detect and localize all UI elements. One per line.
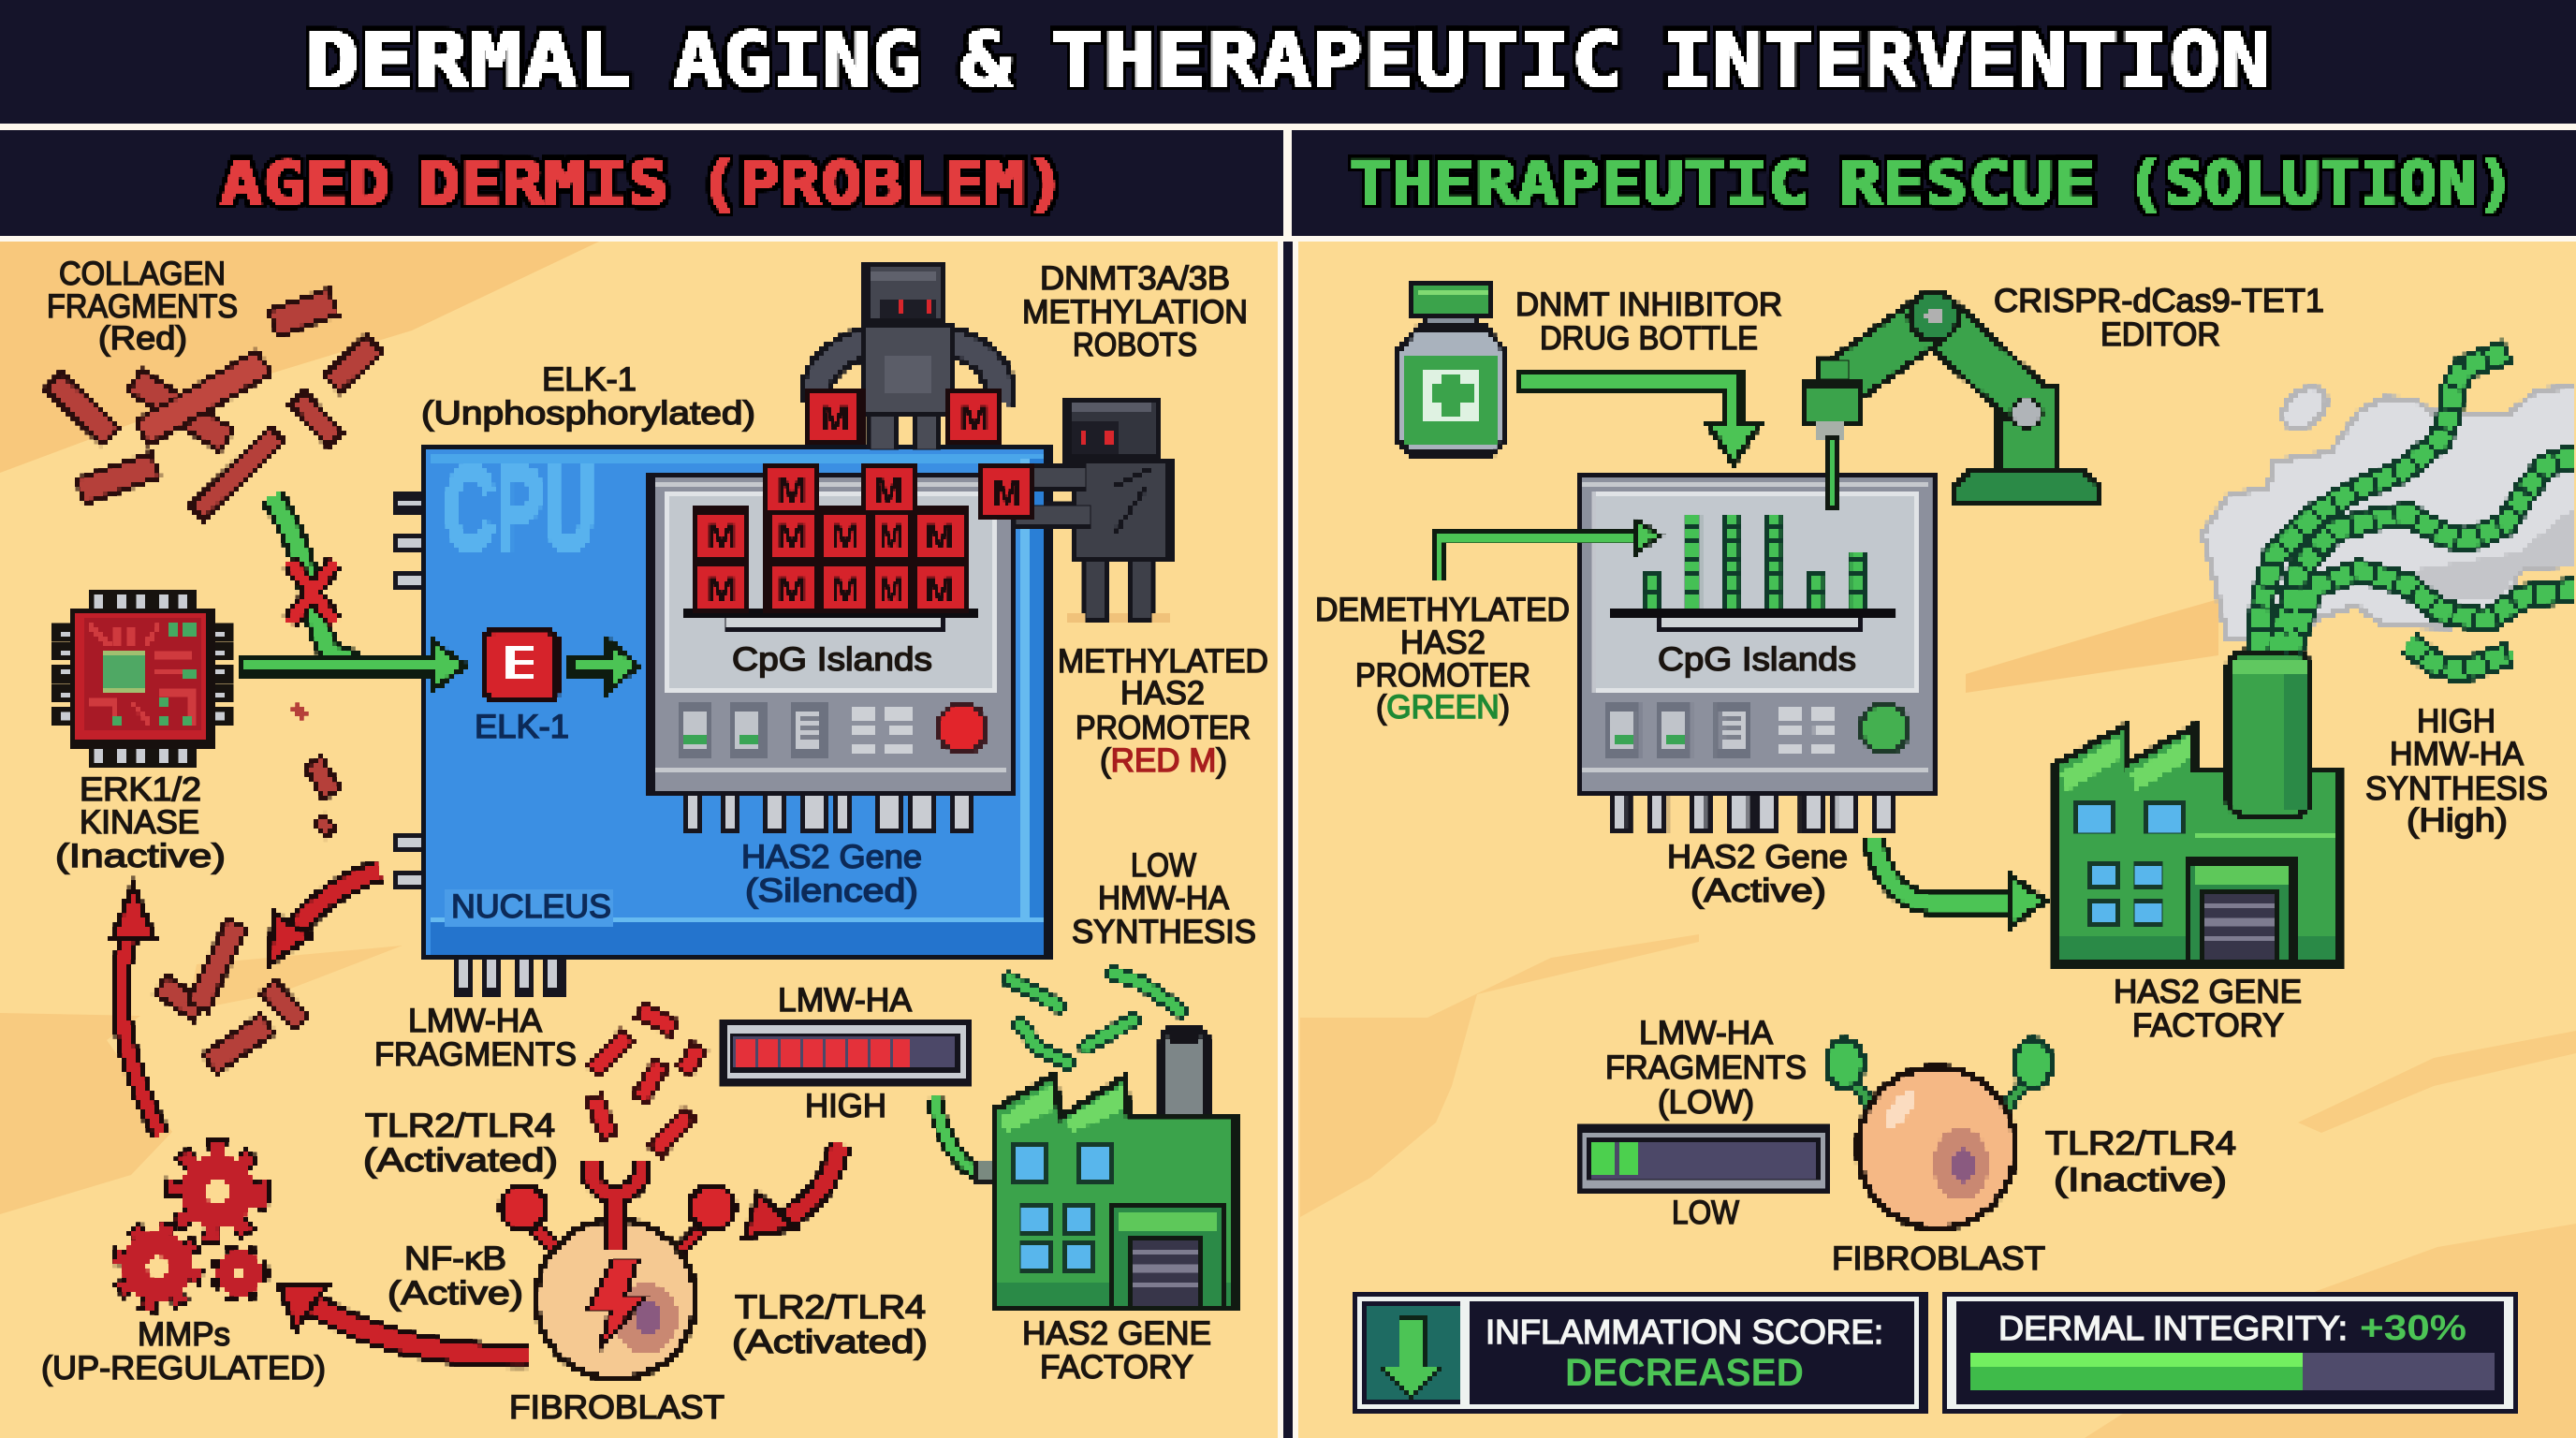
title: DERMAL	[305, 17, 632, 104]
label: DNMT inhibitor	[1515, 286, 1782, 357]
label: LMW-HA fragments: LMW-HA	[408, 1003, 543, 1039]
icon: high HMW-HA strands	[2259, 351, 2576, 671]
readout: dermal integrity text: +30%	[2360, 1309, 2466, 1348]
icon: ERK1/2 kinase chip	[56, 593, 228, 765]
arrow: blocked signal from collagen	[271, 496, 360, 663]
label: MMPs	[41, 1316, 326, 1387]
label: TLR inactive: TLR2/TLR4	[2045, 1125, 2236, 1162]
label: nucleus: NUCLEUS	[451, 888, 611, 925]
arrow: fibroblast to MMPs	[279, 1284, 529, 1356]
label: NF-kB: (Active)	[388, 1275, 523, 1312]
methyl block letters: M	[925, 518, 955, 557]
methyl block letters: M	[879, 518, 903, 557]
arrow: high LMW-HA to fibroblast	[744, 1144, 840, 1238]
labels: aged dermis	[41, 256, 1268, 1426]
title banner	[0, 0, 2576, 242]
label: ELK-1 unphosphorylated	[421, 361, 755, 432]
label: TLR activated left: TLR2/TLR4	[365, 1108, 555, 1144]
label: TLR inactive	[2045, 1125, 2236, 1198]
section header: therapeutic rescue: THERAPEUTIC	[1350, 150, 1809, 219]
label: LMW-HA fragments: FRAGMENTS	[374, 1036, 577, 1073]
label: collagen fragments: COLLAGEN	[59, 256, 226, 292]
title: THERAPEUTIC	[1051, 17, 1623, 104]
methyl block letters: M	[777, 571, 807, 610]
label: high HMW-HA synthesis: HMW-HA	[2390, 736, 2525, 772]
gene pins	[1612, 785, 1892, 831]
panel: HAS2 gene chip silenced	[651, 465, 1013, 831]
icon: methylation robot right	[982, 399, 1170, 624]
label: methylation robots: ROBOTS	[1073, 327, 1197, 363]
methyl block letters: M	[777, 518, 807, 557]
label: TLR activated right: (Activated)	[732, 1324, 928, 1360]
icon: degraded fragments near nucleus	[159, 922, 303, 1065]
label: HAS2 gene silenced: (Silenced)	[745, 873, 918, 909]
label: low HMW-HA synthesis: SYNTHESIS	[1072, 914, 1256, 950]
label: TLR activated right: TLR2/TLR4	[735, 1289, 926, 1326]
label: LMW-HA fragments	[374, 1003, 577, 1073]
methyl block letters: M	[831, 571, 859, 610]
label: collagen fragments: (Red)	[98, 320, 187, 357]
panel: nucleus chip	[394, 440, 1049, 992]
label: factory: FACTORY	[2132, 1007, 2284, 1044]
label: DNMT inhibitor: DNMT INHIBITOR	[1515, 286, 1782, 323]
label: LMW-HA low: (LOW)	[1658, 1084, 1754, 1121]
label: collagen fragments	[47, 256, 238, 357]
label: factory: HAS2 GENE	[1022, 1315, 1211, 1352]
arrow: active gene to factory	[1874, 838, 2045, 927]
label: methylated promoter: (RED M)	[1100, 742, 1227, 779]
methyl block letters: M	[707, 571, 737, 610]
label: ERK kinase: (Inactive)	[55, 838, 226, 874]
label: gauge title: LMW-HA	[778, 982, 913, 1019]
label: demethylated promoter: (GREEN)	[1376, 689, 1510, 726]
label: HAS2 gene silenced	[741, 839, 922, 909]
label: CRISPR editor: CRISPR-dCas9-TET1	[1994, 283, 2324, 319]
methyl block letters: M	[992, 474, 1022, 513]
callout: dermal integrity	[1945, 1294, 2515, 1412]
CpG shelf	[725, 616, 944, 631]
gene controls	[1604, 704, 1909, 756]
icon: collagen fragments	[51, 301, 376, 831]
arrow: nucleus to fragments	[270, 871, 379, 964]
label: ERK kinase: ERK1/2	[80, 771, 201, 808]
readout: inflammation text	[1486, 1313, 1883, 1394]
nucleus label highlight	[444, 888, 614, 925]
methyl block letters: M	[873, 472, 903, 511]
label: CRISPR editor: EDITOR	[2100, 316, 2220, 353]
label: demethylated promoter: HAS2	[1400, 624, 1486, 661]
label: high HMW-HA synthesis: SYNTHESIS	[2365, 770, 2548, 807]
label: LMW-HA low	[1605, 1015, 1807, 1121]
label: TLR activated left: (Activated)	[363, 1142, 558, 1179]
label: methylation robots	[1022, 260, 1248, 363]
panel divider	[1278, 242, 1298, 1438]
arrow: ELK-1 to gene	[571, 640, 638, 691]
label: MMPs: MMPs	[138, 1316, 230, 1353]
label: HAS2 gene silenced: HAS2 Gene	[741, 839, 922, 875]
title: &	[959, 17, 1013, 104]
label: MMPs: (UP-REGULATED)	[41, 1350, 326, 1387]
methyl block letters: M	[879, 571, 903, 610]
label: methylation robots: DNMT3A/3B	[1040, 260, 1230, 297]
methyl block letters: M	[959, 400, 989, 439]
section header: therapeutic rescue: RESCUE	[1839, 150, 2097, 219]
methyl blocks	[696, 465, 965, 612]
gauge: LMW-HA high	[724, 1022, 969, 1082]
label: methylated promoter: PROMOTER	[1076, 710, 1251, 746]
methyl block letters: M	[820, 400, 850, 439]
section header: therapeutic rescue	[1292, 130, 2576, 236]
chip pins	[394, 496, 562, 992]
icon: fibroblast activated	[501, 1161, 735, 1379]
gauge: LMW-HA low	[1581, 1129, 1828, 1190]
label: demethylated promoter: DEMETHYLATED	[1315, 592, 1570, 628]
label: factory	[2114, 974, 2302, 1044]
icon: ELK-1 block: E	[505, 638, 536, 692]
label: DNMT inhibitor: DRUG BOTTLE	[1540, 320, 1758, 357]
label: factory: HAS2 GENE	[2114, 974, 2302, 1010]
methyl block letters	[707, 400, 1022, 610]
label: HAS2 gene active: HAS2 Gene	[1667, 839, 1848, 875]
label: high HMW-HA synthesis	[2365, 703, 2548, 839]
section header: therapeutic rescue: (SOLUTION)	[2126, 150, 2515, 219]
label: low HMW-HA synthesis	[1072, 847, 1256, 950]
section header: aged dermis	[0, 130, 1283, 236]
readout: inflammation text: INFLAMMATION SCORE:	[1486, 1313, 1883, 1351]
gene controls	[677, 704, 987, 756]
readout: inflammation text: DECREASED	[1565, 1350, 1804, 1394]
label: high HMW-HA synthesis: HIGH	[2417, 703, 2496, 740]
icon: ELK-1 block	[485, 631, 557, 700]
label: ERK kinase: KINASE	[80, 804, 199, 841]
label: demethylated promoter: PROMOTER	[1355, 657, 1530, 694]
panel: HAS2 gene chip active	[1579, 476, 1934, 831]
label: demethylated promoter	[1315, 592, 1570, 726]
readout: dermal integrity text: DERMAL INTEGRITY:	[1998, 1309, 2348, 1347]
label: high: HIGH	[805, 1088, 886, 1124]
label: NF-kB	[388, 1240, 523, 1312]
label: low HMW-HA synthesis: LOW	[1131, 847, 1196, 884]
methyl block letters: M	[777, 472, 807, 511]
icon: MMP gears	[122, 1151, 262, 1302]
label: collagen fragments: FRAGMENTS	[47, 288, 238, 325]
label: LMW-HA low: LMW-HA	[1639, 1015, 1774, 1051]
demethylated green strands	[1651, 515, 1857, 607]
gene pins	[684, 785, 970, 831]
callout: inflammation score	[1354, 1294, 1925, 1412]
arrow: fragments back to kinase	[112, 885, 161, 1135]
label: ERK kinase	[55, 771, 226, 874]
label: factory: FACTORY	[1040, 1349, 1193, 1386]
label: low HMW-HA synthesis: HMW-HA	[1098, 880, 1230, 917]
section header: aged dermis: (PROBLEM)	[698, 150, 1066, 219]
icon: methylation robot top	[809, 264, 1001, 449]
label: CRISPR editor	[1994, 283, 2324, 353]
title	[305, 17, 2271, 104]
artwork layer	[51, 264, 2576, 1412]
icon: low HMW-HA strands	[1009, 974, 1181, 1063]
title: AGING	[673, 17, 921, 104]
title: INTERVENTION	[1661, 17, 2271, 104]
arrow: gene to factory (faint)	[934, 1097, 996, 1181]
label: LMW-HA low: FRAGMENTS	[1605, 1049, 1807, 1086]
icon: fibroblast inactive	[1826, 1039, 2052, 1228]
arrow: demethylated promoter pointer	[1440, 521, 1661, 582]
label: ELK-1 unphosphorylated: ELK-1	[542, 361, 637, 398]
icon: drug bottle	[1398, 285, 1505, 454]
label: methylated promoter: HAS2	[1120, 675, 1205, 712]
section header: aged dermis: DERMIS	[418, 150, 669, 219]
label: TLR inactive: (Inactive)	[2054, 1162, 2227, 1198]
icon: HAS2 factory right	[2056, 652, 2339, 964]
label: high HMW-HA synthesis: (High)	[2407, 802, 2508, 839]
progress bar	[1969, 1352, 2493, 1391]
label: TLR activated left	[363, 1108, 558, 1179]
label: ELK-1: ELK-1	[475, 709, 569, 745]
label: CpG islands silenced: CpG Islands	[732, 641, 932, 678]
methyl block letters: M	[925, 571, 955, 610]
methyl block letters: M	[831, 518, 859, 557]
methyl block letters: M	[707, 518, 737, 557]
label: methylated promoter	[1058, 643, 1268, 779]
icon: LMW-HA fragments	[592, 1009, 700, 1153]
label: HAS2 gene active	[1667, 839, 1848, 909]
icon: HAS2 factory left	[995, 1029, 1236, 1308]
labels: therapeutic rescue	[1315, 283, 2548, 1277]
CpG shelf	[1659, 616, 1859, 631]
label: factory	[1022, 1315, 1211, 1386]
label: low: LOW	[1672, 1195, 1739, 1231]
icon: smoke cloud	[2203, 379, 2576, 639]
arrow: kinase to ELK-1	[242, 640, 466, 691]
label: ELK-1 unphosphorylated: (Unphosphorylated)	[421, 395, 755, 432]
label: methylated promoter: METHYLATED	[1058, 643, 1268, 680]
arrow: bottle to gene chip	[1520, 372, 1760, 463]
label: HAS2 gene active: (Active)	[1690, 873, 1826, 909]
label: TLR activated right	[732, 1289, 928, 1360]
icon: down arrow	[1365, 1303, 1468, 1402]
label: methylation robots: METHYLATION	[1022, 294, 1248, 330]
label: fibroblast: FIBROBLAST	[1832, 1240, 2045, 1277]
label: CpG islands active: CpG Islands	[1658, 641, 1856, 678]
section header: aged dermis: AGED	[220, 150, 390, 219]
label: fibroblast: FIBROBLAST	[509, 1389, 724, 1426]
CPU watermark: CPU	[444, 440, 595, 577]
label: NF-kB: NF-κB	[404, 1240, 506, 1277]
icon: CRISPR robotic arm	[1806, 292, 2100, 509]
